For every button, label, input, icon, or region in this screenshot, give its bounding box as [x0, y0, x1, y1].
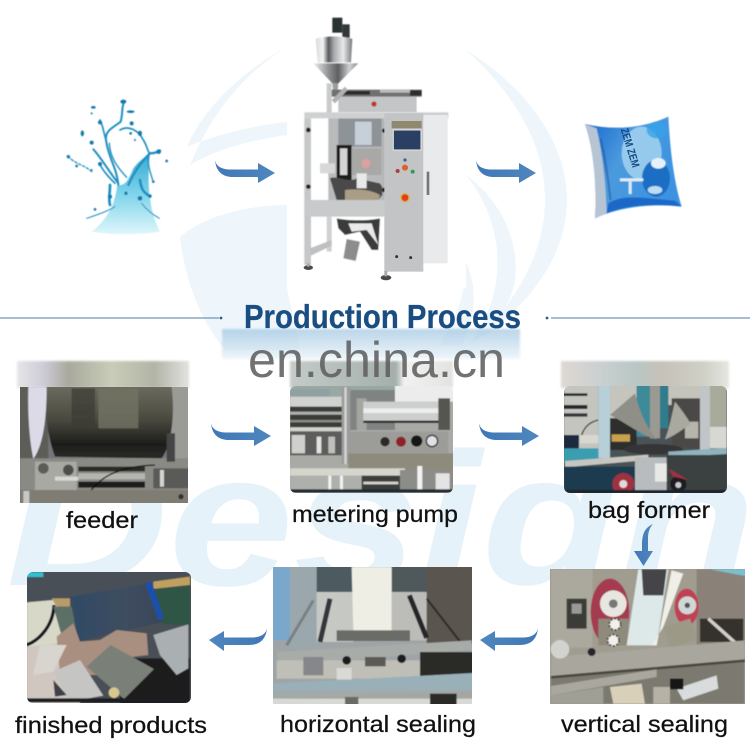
watermark: en.china.cn: en.china.cn [248, 332, 505, 388]
label: finished products: finished products [15, 712, 207, 738]
divider: left line [0, 317, 222, 319]
photo: feeder [15, 361, 195, 505]
control buttons [396, 158, 415, 202]
illustration: packaging machine [304, 18, 448, 280]
arrow: metering pump to bag former [479, 423, 539, 446]
icon: water splash [67, 100, 168, 234]
background watermark: swoosh emblem [180, 47, 567, 350]
photo: vertical sealing [548, 567, 748, 707]
machine hopper [313, 18, 358, 115]
photo: finished products [27, 572, 191, 703]
arrow: feeder to metering pump [211, 423, 271, 446]
label: feeder: feeder [66, 507, 138, 533]
arrow: bag former to vertical sealing [634, 524, 653, 566]
machine feet [304, 263, 391, 280]
label: vertical sealing: vertical sealing [561, 711, 728, 737]
background watermark: Design lettering: Design [6, 414, 750, 626]
photo: bag former [560, 361, 732, 498]
icon: water pouch [585, 117, 682, 218]
white panel behind machine [287, 0, 466, 288]
control cabinet [384, 113, 448, 272]
arrow: vertical sealing to horizontal sealing [480, 628, 538, 651]
label: bag former: bag former [588, 497, 710, 523]
photo: horizontal sealing [270, 562, 477, 707]
metering pump on top [332, 87, 422, 112]
divider: right line [546, 317, 750, 319]
arrow: water to machine [215, 160, 275, 183]
label: metering pump: metering pump [292, 501, 458, 527]
photo: metering pump [285, 361, 460, 498]
touch screen [393, 130, 421, 150]
frame and open interior [304, 112, 448, 265]
title: Production Process [244, 298, 521, 335]
arrow: machine to bag [476, 160, 536, 183]
icon: water pouch: ZEM ZEM [618, 127, 641, 169]
title reflection [222, 329, 520, 359]
label: horizontal sealing: horizontal sealing [280, 711, 476, 737]
arrow: horizontal sealing to finished products [209, 628, 267, 651]
